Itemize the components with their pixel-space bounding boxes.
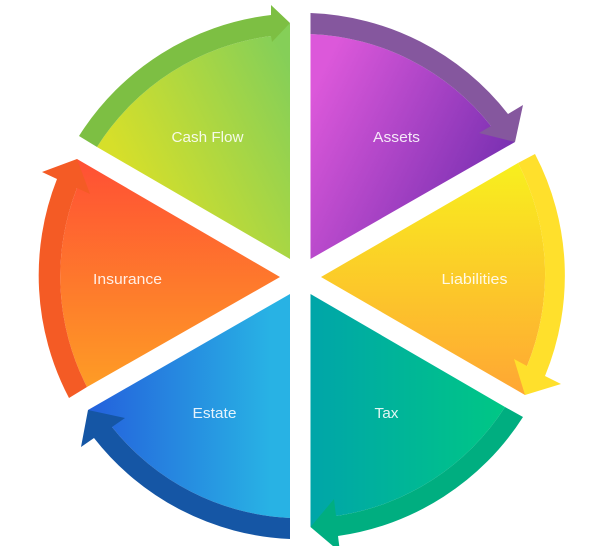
arrow: Liabilities [514,154,565,395]
arrow: Insurance [39,159,90,398]
segment: Tax [310,294,523,546]
label: Cash Flow: Cash Flow [172,129,244,146]
arrow: Tax [310,407,523,546]
label: Liabilities: Liabilities [442,271,508,288]
segment: Liabilities [321,154,565,395]
segment: Insurance [39,159,280,398]
segment: Cash Flow [79,5,290,259]
label: Estate: Estate [192,405,236,422]
arrow: Assets [310,13,523,142]
arrow: Estate [81,410,290,539]
arrow: Cash Flow [79,5,290,147]
label: Tax: Tax [374,405,399,422]
segment: Assets [310,13,523,259]
segment: Estate [81,294,290,539]
label: Insurance: Insurance [93,271,162,288]
label: Assets: Assets [373,129,420,146]
